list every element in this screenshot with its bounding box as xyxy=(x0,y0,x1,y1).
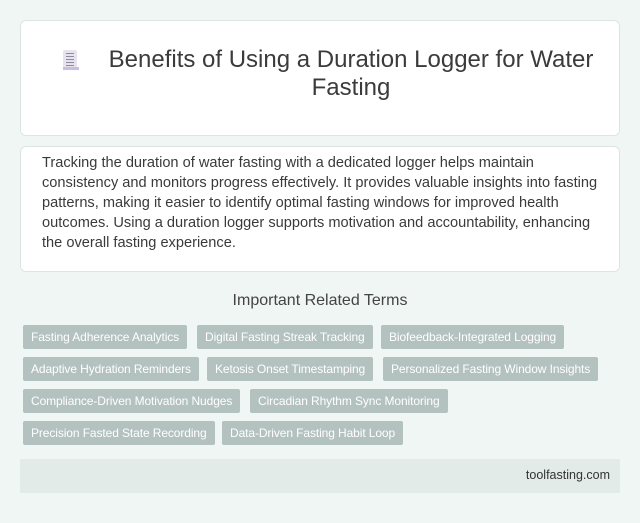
tag xyxy=(23,389,240,413)
footer text: toolfasting.com xyxy=(526,468,610,482)
panel: title card xyxy=(20,20,620,136)
tag: Adaptive Hydration Reminders xyxy=(31,362,191,376)
tag xyxy=(207,357,373,381)
tag xyxy=(222,421,403,445)
heading: related terms: Important Related Terms xyxy=(233,292,407,309)
tag: Data-Driven Fasting Habit Loop xyxy=(230,426,395,440)
panel: description xyxy=(20,146,620,272)
icon: document xyxy=(63,50,77,70)
tag: Fasting Adherence Analytics xyxy=(31,330,179,344)
tag xyxy=(23,325,187,349)
tag xyxy=(381,325,564,349)
tag: Compliance-Driven Motivation Nudges xyxy=(31,394,232,408)
footer xyxy=(20,459,620,493)
tag xyxy=(197,325,373,349)
tag: Ketosis Onset Timestamping xyxy=(215,362,365,376)
tag xyxy=(23,421,215,445)
text block: Tracking the duration of water fasting with a dedicated logger helps maintain consistency and monitors progress effectively. It provides valuable insights into fasting patterns, making it easier to identify optimal fasting windows for improved health outcomes. Using a duration logger supports motivation and accountability, enhancing the overall fasting experience. xyxy=(42,155,597,251)
tag: Biofeedback-Integrated Logging xyxy=(389,330,556,344)
tag xyxy=(250,389,448,413)
title: Benefits of Using a Duration Logger for Water Fasting xyxy=(109,46,593,101)
tag: Precision Fasted State Recording xyxy=(31,426,207,440)
tag: Digital Fasting Streak Tracking xyxy=(205,330,365,344)
tag: Personalized Fasting Window Insights xyxy=(391,362,590,376)
tag xyxy=(383,357,598,381)
tag xyxy=(23,357,199,381)
tag: Circadian Rhythm Sync Monitoring xyxy=(258,394,440,408)
